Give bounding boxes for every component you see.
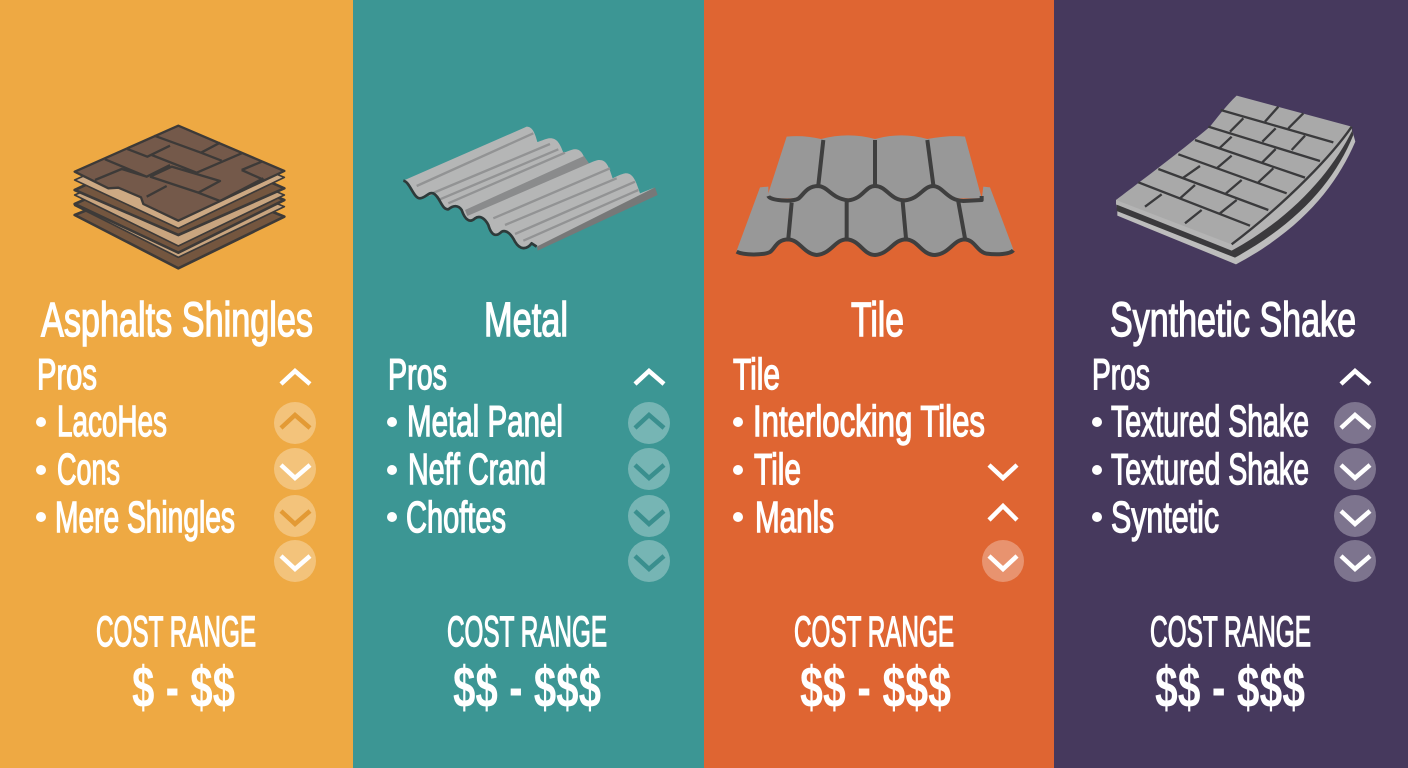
panel: tile [704,0,1054,768]
text: cost range: COST RANGE [96,608,256,656]
icon: asphalt shingle stack [75,126,284,268]
icons: chevrons [1334,371,1376,582]
icon: corrugated metal sheet [403,127,658,251]
text: cost range: COST RANGE [447,608,607,656]
text: pros list: Textured Shake [1111,397,1309,446]
icon: interlocking roof tiles [737,135,1013,255]
icons: chevrons [628,371,670,582]
heading: metal: Metal [484,294,568,347]
text: pros list: Pros [37,350,97,399]
text: pros list: Syntetic [1111,493,1219,542]
text: pros list [1092,350,1309,542]
text: tile list: Interlocking Tiles [753,397,985,446]
text: cost value: $ - $$ [132,655,235,720]
text: tile list: Tile [754,445,801,494]
heading: asphalts shingles: Asphalts Shingles [41,294,313,347]
heading: tile: Tile [851,294,904,347]
text: cost value: $$ - $$$ [453,655,601,720]
text: pros list: Neff Crand [408,445,546,494]
text: pros list: Cons [57,445,120,494]
text: tile list [733,350,985,542]
icon: synthetic shake sheet [1116,96,1355,264]
text: cost value: $$ - $$$ [1155,655,1305,720]
text: tile list: Tile [733,350,780,399]
text: pros list [36,350,235,542]
text: pros list: Pros [1092,350,1150,399]
text: tile list: Manls [755,493,834,542]
icons: chevrons [982,465,1024,582]
text: cost value: $$ - $$$ [800,655,951,720]
text: cost range: COST RANGE [794,608,954,656]
text: pros list: Mere Shingles [55,493,235,542]
icons: chevrons [274,371,316,582]
panel: asphalt shingles [0,0,353,768]
text: pros list: LacoHes [57,397,167,446]
panel: metal [353,0,704,768]
text: pros list: Choftes [406,493,506,542]
text: pros list: Textured Shake [1111,445,1309,494]
text: pros list: Pros [388,350,447,399]
text: pros list: Metal Panel [407,397,563,446]
text: pros list [387,350,563,542]
panel: synthetic shake [1054,0,1408,768]
